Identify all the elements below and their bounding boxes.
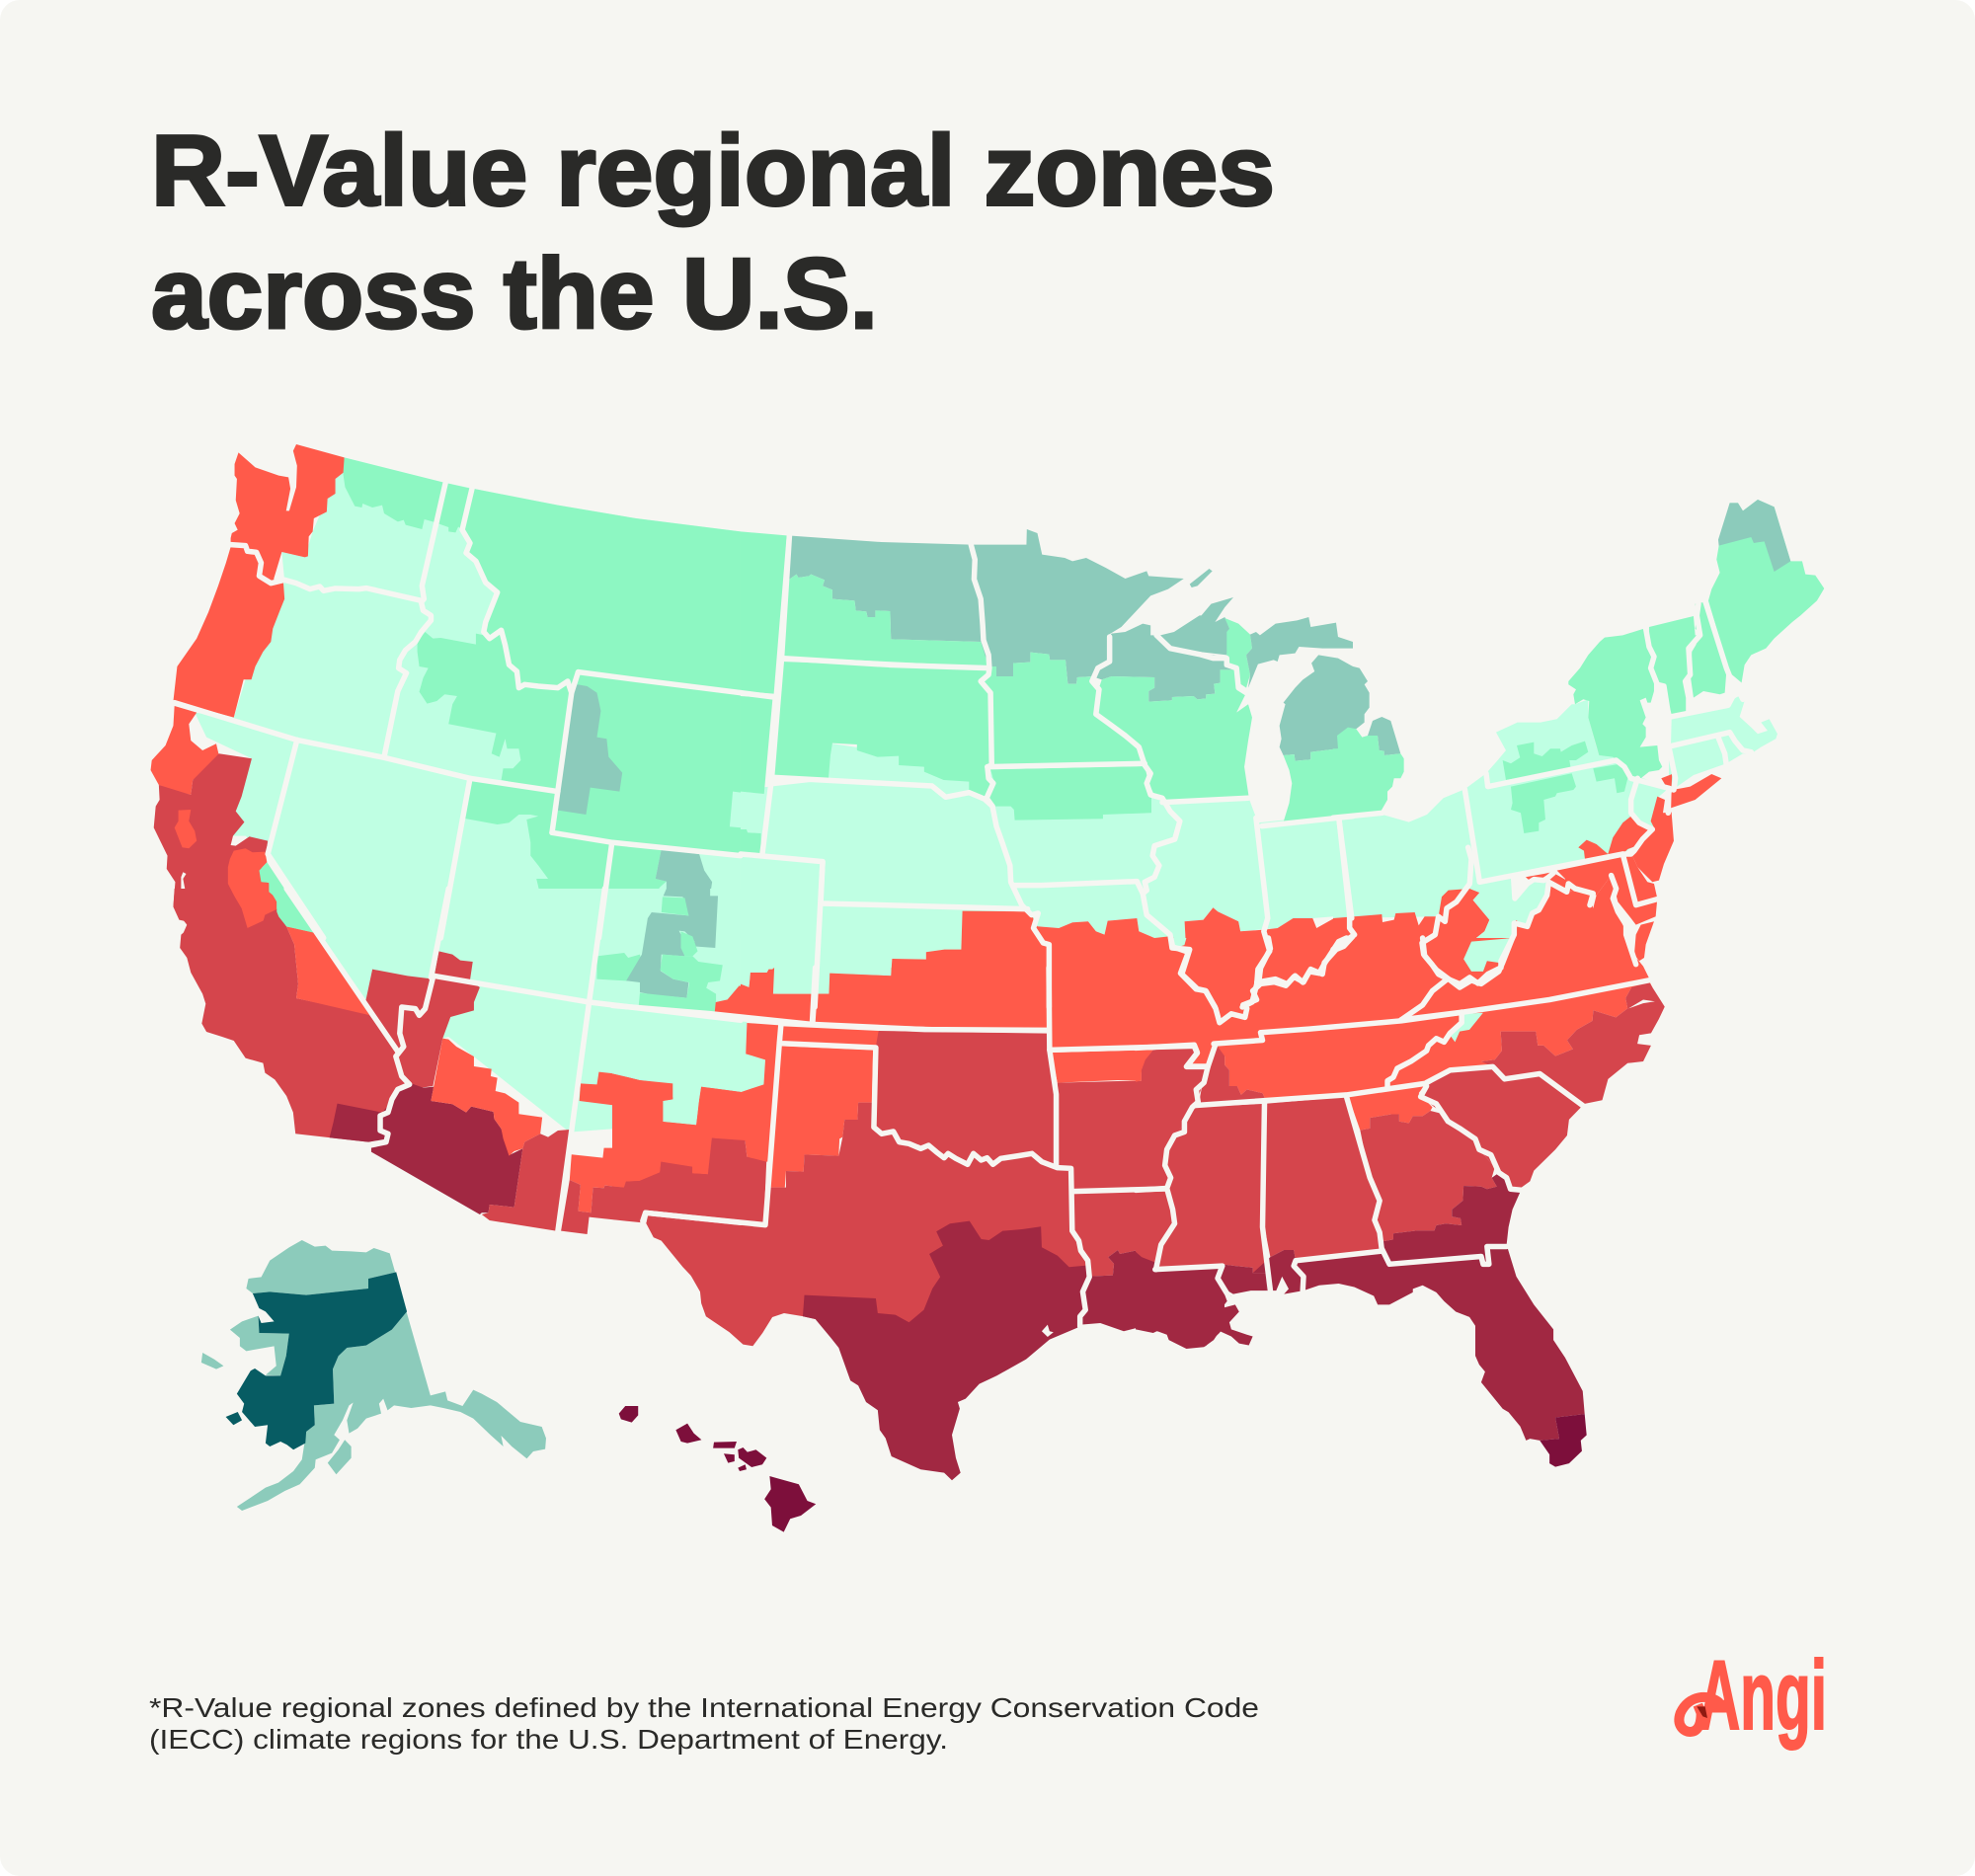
zones: southern plains and Texas: [612, 968, 1224, 1480]
zones: Northeast and mid-Atlantic: [1333, 500, 1824, 987]
title: [151, 117, 1275, 350]
title: across the U.S.: [151, 239, 878, 350]
zones: Pacific Northwest and northern Rockies: [151, 444, 741, 938]
Hawaii: [619, 1406, 816, 1532]
Angi logo: Angi: [1698, 1640, 1827, 1750]
footnote: [149, 1692, 1259, 1755]
zones: Southeast: [1136, 938, 1665, 1467]
footnote: *R-Value regional zones defined by the International Energy Conservation Code: [149, 1692, 1259, 1723]
footnote: (IECC) climate regions for the U.S. Department of Energy.: [149, 1724, 948, 1755]
title: R-Value regional zones: [151, 117, 1275, 227]
Alaska: [201, 1240, 546, 1511]
state boundary lines: [175, 483, 1751, 1326]
zones: Southwest: [173, 889, 741, 1284]
zones: northern plains and upper Midwest: [741, 529, 1353, 1007]
map: climate zones of the U.S.: [151, 444, 1824, 1532]
Angi logo: [1679, 1640, 1827, 1750]
